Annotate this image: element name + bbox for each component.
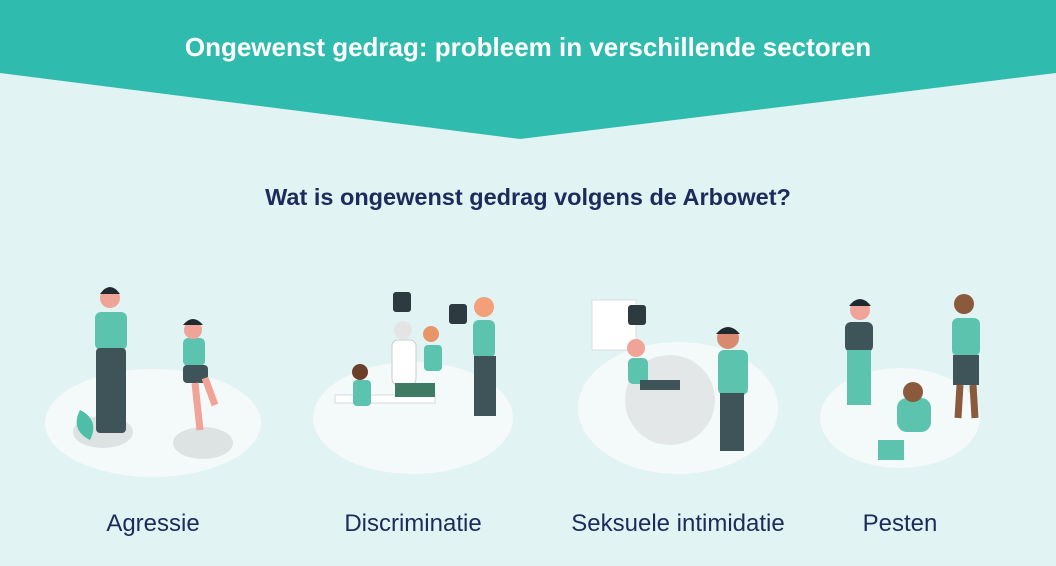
header banner [0, 0, 1056, 139]
label: discriminatie: Discriminatie [344, 510, 482, 537]
label: seksuele intimidatie: Seksuele intimidatie [571, 510, 785, 537]
illustration: seksuele intimidatie [578, 300, 778, 474]
subheading: Wat is ongewenst gedrag volgens de Arbowet? [265, 184, 791, 210]
title: Ongewenst gedrag: probleem in verschillende sectoren [185, 32, 871, 62]
illustration: pesten [820, 294, 980, 468]
label: agressie: Agressie [106, 510, 200, 537]
illustration: agressie [45, 287, 261, 477]
label: pesten: Pesten [863, 510, 937, 537]
illustration: discriminatie [313, 292, 513, 474]
